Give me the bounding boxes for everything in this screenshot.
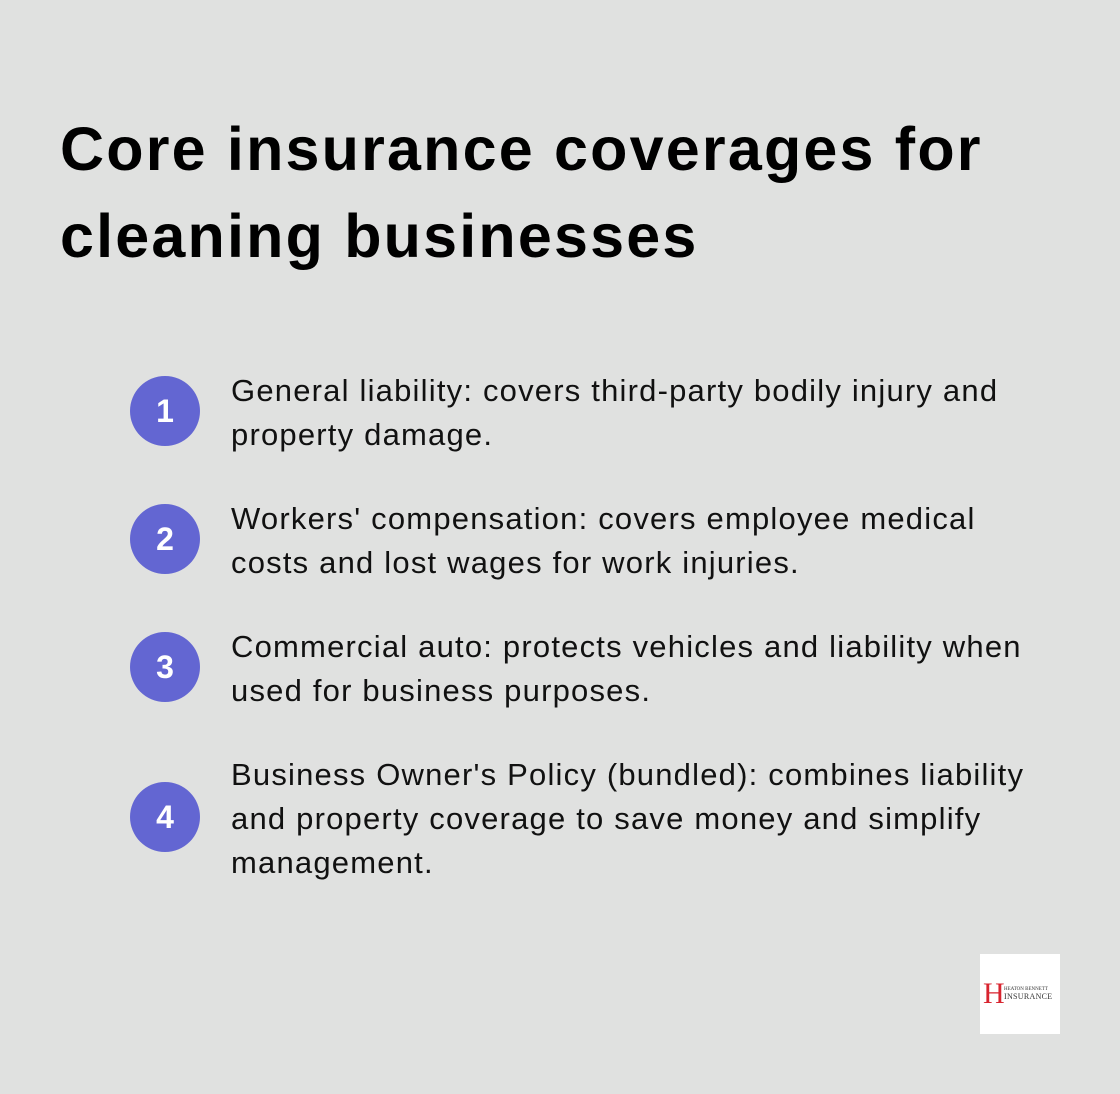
item 2 (130, 501, 976, 580)
item 3 (130, 629, 1022, 708)
text 3: Commercial auto: protects vehicles and liability when (231, 629, 1022, 664)
logo text: INSURANCE (1004, 992, 1052, 1001)
circle 1: 1 (156, 393, 174, 429)
circle 4: 4 (156, 799, 174, 835)
circle 2: 2 (156, 521, 174, 557)
logo text: HEATON BENNETT (1004, 987, 1048, 992)
text 2 (231, 501, 976, 580)
text 4: Business Owner's Policy (bundled): combines liability (231, 757, 1024, 792)
text 2: Workers' compensation: covers employee medical (231, 501, 976, 536)
circle 1 (130, 376, 200, 446)
logo (980, 954, 1060, 1034)
circle 3 (130, 632, 200, 702)
circle 4 (130, 782, 200, 852)
circle 2 (130, 504, 200, 574)
text 3 (231, 629, 1022, 708)
text 1: General liability: covers third-party bodily injury and (231, 373, 998, 408)
title: cleaning businesses (60, 202, 698, 270)
text 3: used for business purposes. (231, 673, 651, 708)
text 2: costs and lost wages for work injuries. (231, 545, 800, 580)
text 4: management. (231, 845, 434, 880)
item 1 (130, 373, 998, 452)
text 1 (231, 373, 998, 452)
circle 3: 3 (156, 649, 174, 685)
title: Core insurance coverages for (60, 115, 983, 183)
text 4: and property coverage to save money and simplify (231, 801, 981, 836)
title (60, 115, 983, 270)
logo text (1004, 986, 1052, 1001)
text 1: property damage. (231, 417, 493, 452)
item 4 (130, 757, 1024, 880)
text 4 (231, 757, 1024, 880)
logo H: H (983, 977, 1005, 1010)
